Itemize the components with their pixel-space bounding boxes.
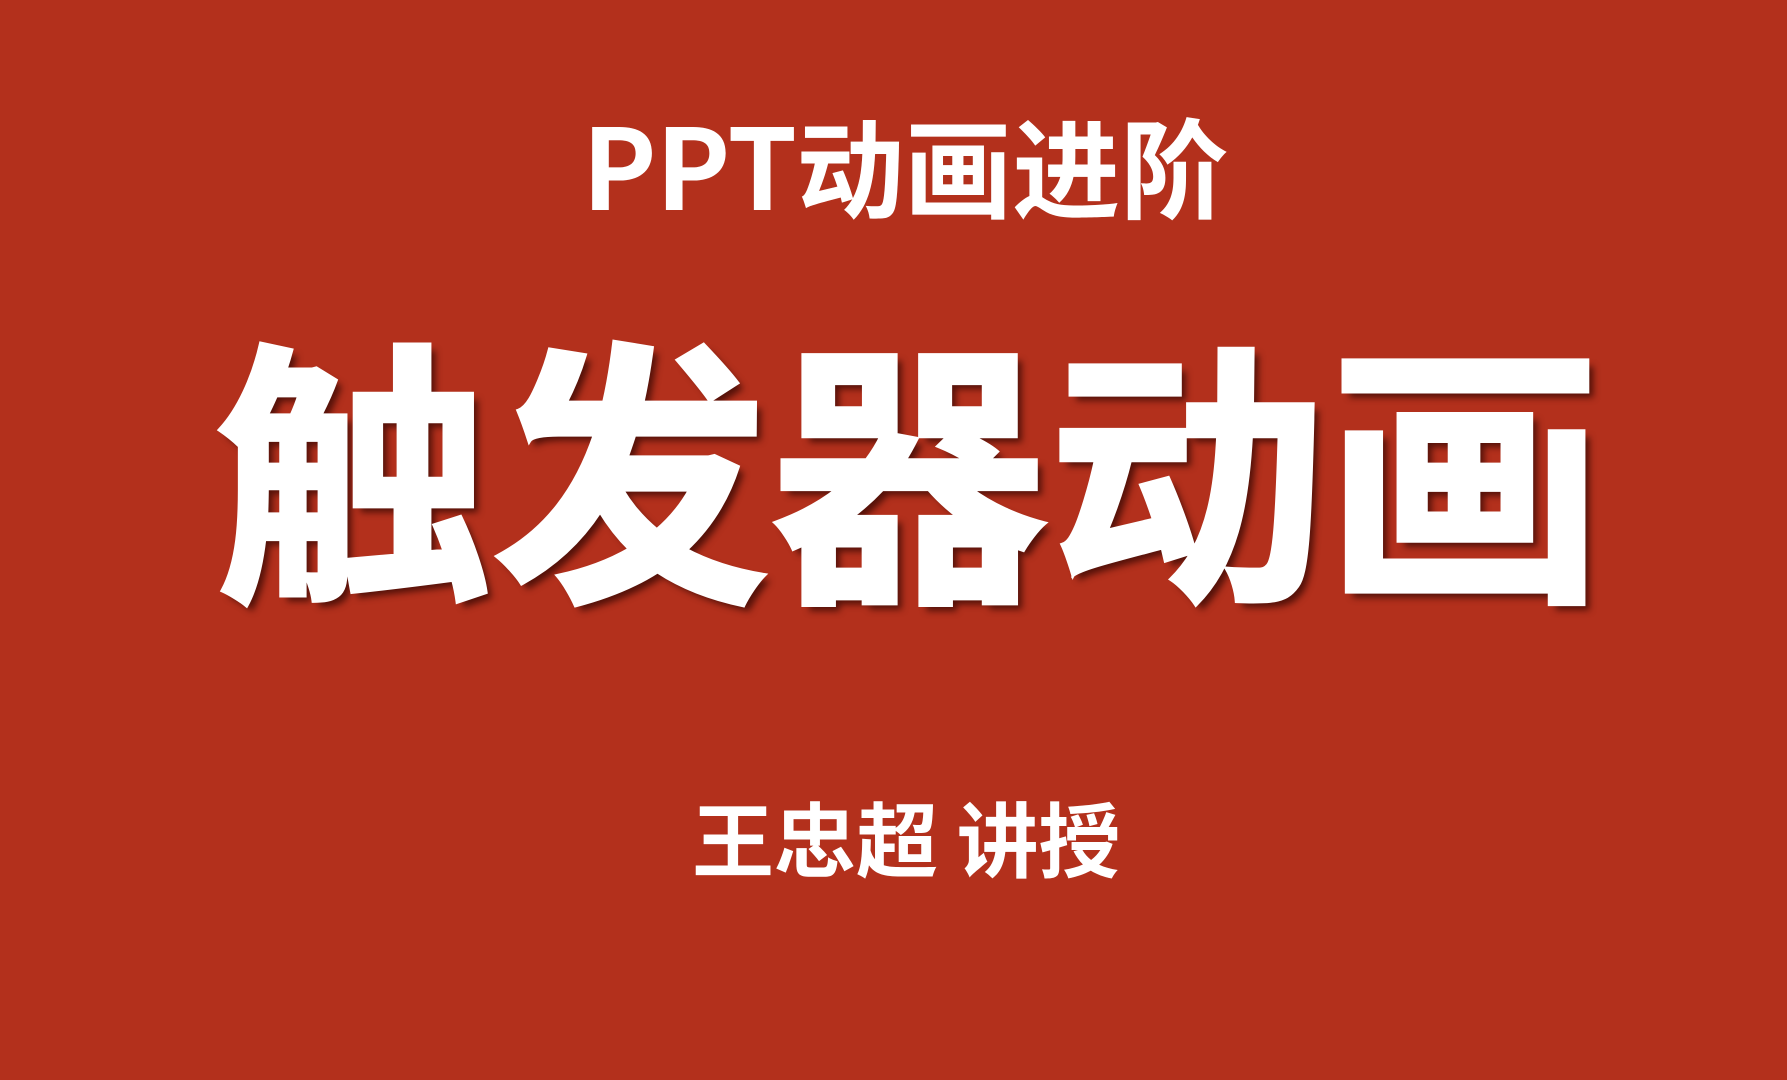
main title: 触发器动画: 触发器动画 xyxy=(214,259,1604,661)
presenter: 王忠超 讲授: 王忠超 讲授 xyxy=(692,776,1121,895)
subtitle: PPT动画进阶: PPT动画进阶 xyxy=(582,81,1228,243)
